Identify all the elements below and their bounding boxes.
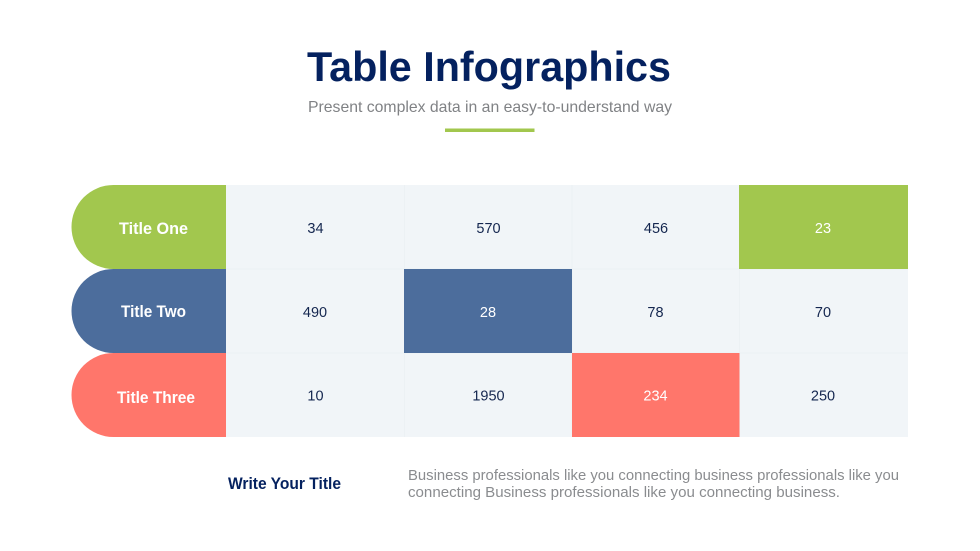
values: title two [303,269,831,353]
values: title one: 34 [307,221,324,237]
values: title three [307,353,835,437]
footer body text: connecting Business professionals like you connecting business. [408,484,840,501]
values: title three: 234 [643,388,668,404]
row label: title two [72,269,226,353]
footer heading: Write Your Title [228,475,341,493]
footer [228,467,899,501]
header [307,43,672,132]
values: title three: 10 [307,388,324,404]
subtitle: Present complex data in an easy-to-understand way [308,99,672,116]
row: title two [72,269,831,353]
values: title one: 23 [815,221,831,237]
cell backgrounds [226,185,908,437]
footer body text [408,467,899,501]
row: title one [72,185,908,269]
values: title one [307,185,908,269]
row label: title two: Title Two [121,303,186,321]
values: title two: 78 [647,305,664,321]
values: title three: 1950 [472,388,505,404]
accent underline [445,128,534,132]
table [72,185,908,437]
values: title three: 250 [811,388,835,404]
title: Table Infographics [307,43,671,90]
row label: title one: Title One [119,220,188,238]
values: title one: 570 [476,221,501,237]
row label: title three: Title Three [117,389,195,407]
footer body text: Business professionals like you connecting business professionals like you [408,467,899,484]
values: title two: 490 [303,305,327,321]
row: title three [72,353,835,437]
row label: title three [72,353,226,437]
values: title one: 456 [644,221,668,237]
row label: title one [72,185,226,269]
values: title two: 70 [815,305,831,321]
values: title two: 28 [480,305,496,321]
